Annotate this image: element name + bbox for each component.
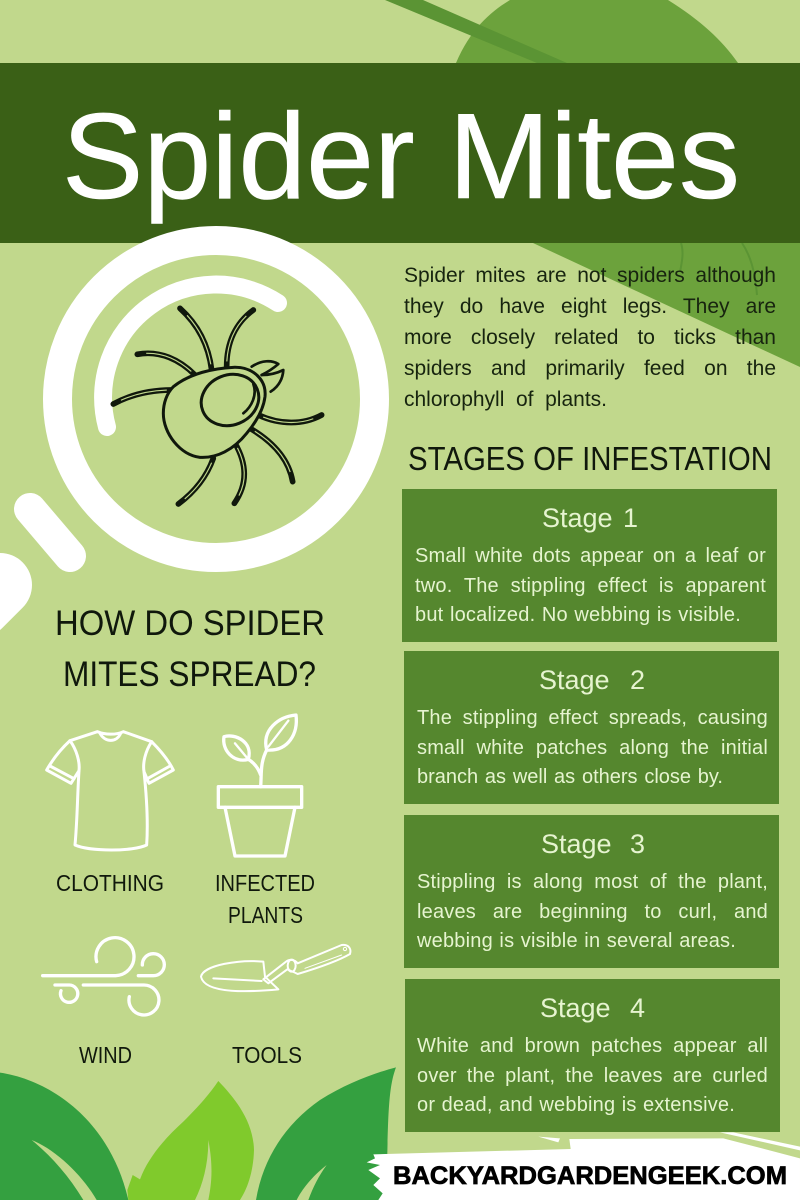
heading: how do spider mites spread: MITES SPREAD? (63, 655, 316, 694)
panel: stage 2: The stippling effect spreads, causing (417, 707, 768, 729)
icon: spider mite (113, 308, 322, 504)
panel: stage 3 (404, 815, 779, 968)
panel: stage 2: small white patches along the initial (417, 737, 768, 759)
panel: stage 1: Small white dots appear on a leaf or (415, 545, 766, 567)
bottom leaves (0, 1067, 396, 1200)
panel: stage 4 (405, 979, 780, 1132)
icon: potted plant (218, 715, 302, 856)
panel: stage 4: White and brown patches appear all (417, 1035, 768, 1057)
panel: stage 1: two. The stippling effect is apparent (415, 575, 766, 597)
icon: garden trowel (201, 945, 350, 991)
labels: spread routes: PLANTS (228, 902, 303, 928)
panel: stage 2 (404, 651, 779, 804)
panel: stage 4: or dead, and webbing is extensive. (417, 1094, 735, 1116)
panel: stage 1 (402, 489, 777, 642)
title: Spider Mites (62, 88, 740, 224)
icon: t-shirt (47, 732, 173, 850)
background leaf: top right (385, 0, 800, 367)
title banner (0, 63, 800, 243)
labels: spread routes (56, 870, 315, 1068)
labels: spread routes: INFECTED (215, 870, 315, 896)
intro paragraph: Spider mites are not spiders although (404, 264, 776, 287)
panel: stage 3: Stippling is along most of the plant, (417, 871, 768, 893)
icon: magnifying glass (0, 240, 374, 605)
intro paragraph: they do have eight legs. They are (404, 295, 776, 318)
labels: spread routes: WIND (79, 1042, 132, 1068)
labels: spread routes: TOOLS (232, 1042, 302, 1068)
icon: wind (43, 938, 164, 1015)
panel: stage 4: over the plant, the leaves are curled (417, 1065, 768, 1087)
panel: stage 2: Stage 2 (539, 665, 645, 695)
intro paragraph: spiders and primarily feed on the (404, 357, 776, 380)
labels: spread routes: CLOTHING (56, 870, 164, 896)
heading: how do spider mites spread (55, 604, 325, 694)
intro paragraph (404, 264, 776, 411)
panel: stage 3: Stage 3 (541, 829, 645, 859)
intro paragraph: chlorophyll of plants. (404, 388, 607, 411)
panel: stage 3: webbing is visible in several areas. (417, 930, 736, 952)
website banner: BACKYARDGARDENGEEK.COM (393, 1162, 787, 1190)
panel: stage 4: Stage 4 (540, 993, 645, 1023)
website banner (367, 1132, 800, 1200)
panel: stage 1: Stage 1 (542, 503, 638, 533)
panel: stage 3: leaves are beginning to curl, and (417, 901, 768, 923)
panel: stage 2: branch as well as others close by. (417, 766, 723, 788)
panel: stage 1: but localized. No webbing is visible. (415, 604, 741, 626)
intro paragraph: more closely related to ticks than (404, 326, 776, 349)
heading: how do spider mites spread: HOW DO SPIDER (55, 604, 325, 643)
